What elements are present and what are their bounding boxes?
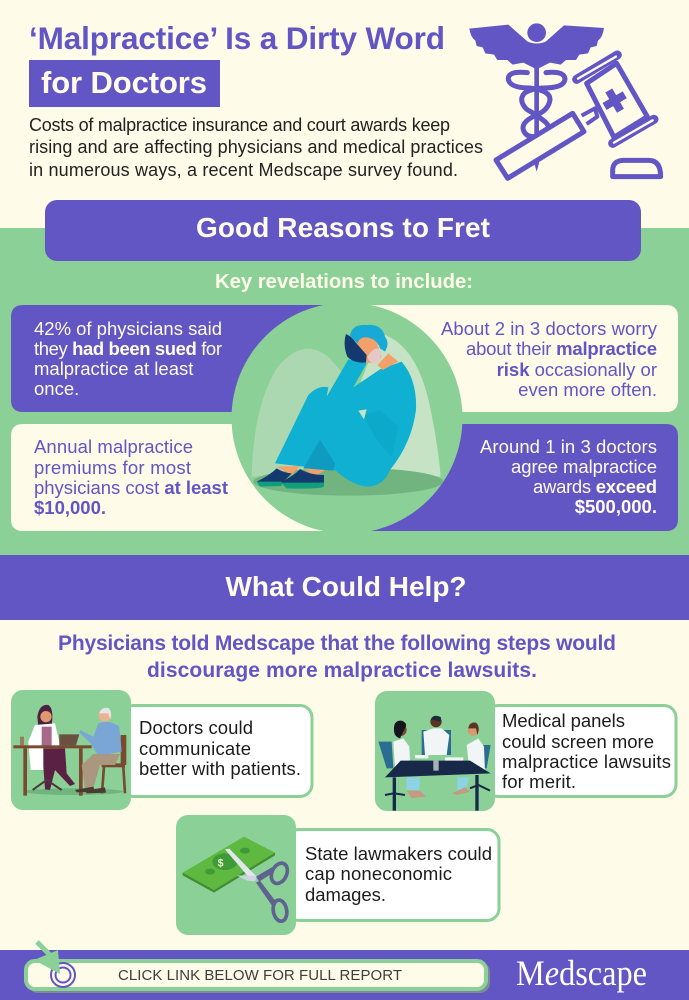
panel: annual premiums: Annual malpractice xyxy=(34,436,193,457)
subheading: physicians told Medscape xyxy=(58,632,616,682)
panel: 1 in 3 awards: awards exceed xyxy=(533,476,657,497)
card: medical panels: could screen more xyxy=(502,731,654,752)
icon: pointer arrow and target xyxy=(34,942,75,987)
panel: annual premiums: physicians cost at least xyxy=(34,477,228,498)
panel: 2 in 3 worry xyxy=(345,305,678,412)
gavel head xyxy=(587,63,647,137)
intro text: rising and are affecting physicians and medical practices xyxy=(29,137,483,157)
logo: Medscape: Medscape xyxy=(516,953,647,993)
panel: 42 percent sued xyxy=(11,305,345,412)
illustration: scissors cutting a dollar bill: $ xyxy=(218,858,224,870)
illustration: doctor and patient at desk xyxy=(13,705,126,796)
card: doctors communicate: Doctors could xyxy=(139,717,253,738)
card: state lawmakers xyxy=(176,815,499,935)
shoes xyxy=(277,466,300,475)
footer bar xyxy=(0,942,689,1000)
card: state lawmakers: damages. xyxy=(305,884,386,905)
panel: 2 in 3 worry: about their malpractice xyxy=(466,338,657,359)
panel: 1 in 3 awards xyxy=(345,424,678,531)
illustration: worried doctor in circle xyxy=(232,302,462,534)
panel: 1 in 3 awards: agree malpractice xyxy=(511,456,657,477)
panel: annual premiums: $10,000. xyxy=(34,497,106,518)
panel: annual premiums: premiums for most xyxy=(34,457,191,478)
subheading: key revelations: Key revelations to include: xyxy=(215,271,473,293)
button: click link: CLICK LINK BELOW FOR FULL REPORT xyxy=(118,967,402,984)
title xyxy=(29,20,445,107)
card: state lawmakers: cap noneconomic xyxy=(305,863,452,884)
card: doctors communicate xyxy=(11,690,312,810)
doctor figure xyxy=(275,359,416,487)
banner: what could help xyxy=(0,555,689,620)
intro text: Costs of malpractice insurance and court awards keep xyxy=(29,115,450,135)
panel: 42 percent sued: they had been sued for xyxy=(34,338,222,359)
card: medical panels: for merit. xyxy=(502,771,576,792)
card: medical panels xyxy=(375,691,676,811)
panel: 2 in 3 worry: even more often. xyxy=(518,379,657,400)
banner: what could help: What Could Help? xyxy=(225,571,467,602)
illustration: scissors cutting a dollar bill xyxy=(183,837,290,922)
panel: 2 in 3 worry: About 2 in 3 doctors worry xyxy=(441,318,658,339)
panel: 42 percent sued: 42% of physicians said xyxy=(34,318,222,339)
intro text: in numerous ways, a recent Medscape survey found. xyxy=(29,160,458,180)
button: click link xyxy=(26,961,490,993)
panel: 1 in 3 awards: $500,000. xyxy=(575,496,657,517)
title: ‘Malpractice’ Is a Dirty Word xyxy=(29,20,445,56)
panel: good reasons green band xyxy=(0,228,689,555)
card: medical panels: Medical panels xyxy=(502,710,625,731)
subheading: physicians told Medscape: discourage more malpractice lawsuits. xyxy=(147,659,537,682)
card: doctors communicate: communicate xyxy=(139,738,251,759)
panel: 42 percent sued: malpractice at least xyxy=(34,358,193,379)
title: for Doctors xyxy=(41,65,207,100)
gavel handle xyxy=(496,113,584,178)
panel: 2 in 3 worry: risk occasionally or xyxy=(497,359,657,380)
panel: annual premiums xyxy=(11,424,345,531)
panel: 1 in 3 awards: Around 1 in 3 doctors xyxy=(480,436,657,457)
subheading: physicians told Medscape: Physicians told Medscape that the following steps would xyxy=(58,632,616,655)
panel: 42 percent sued: once. xyxy=(34,378,79,399)
gavel base xyxy=(613,160,661,177)
heading: good reasons to fret xyxy=(45,200,641,261)
intro text xyxy=(29,115,483,180)
icon: caduceus and gavel xyxy=(469,23,661,178)
card: doctors communicate: better with patients. xyxy=(139,758,301,779)
card: state lawmakers: State lawmakers could xyxy=(305,843,492,864)
heading: good reasons to fret: Good Reasons to Fret xyxy=(196,212,490,243)
card: medical panels: malpractice lawsuits xyxy=(502,751,671,772)
illustration: doctors at a table xyxy=(378,716,491,811)
